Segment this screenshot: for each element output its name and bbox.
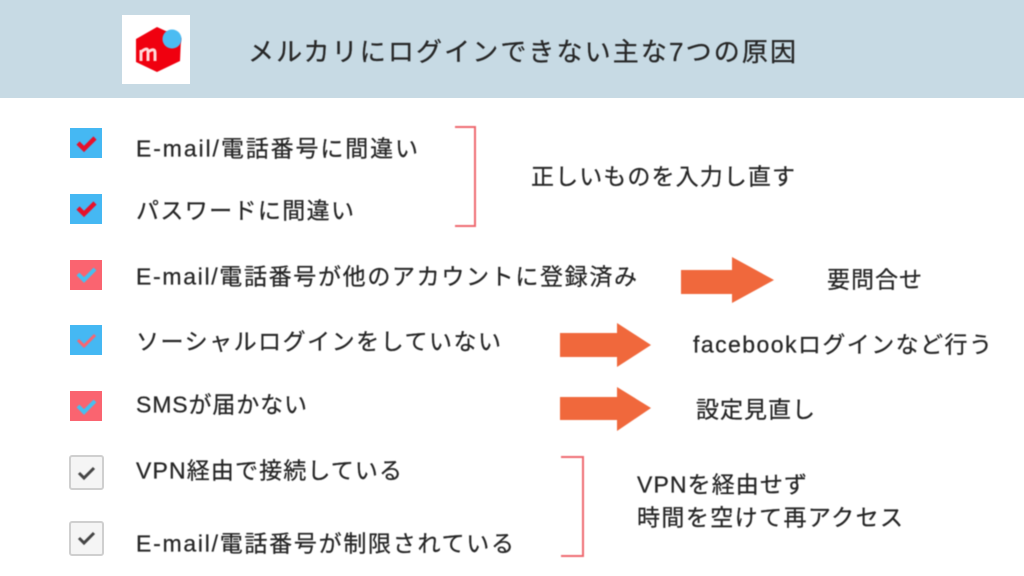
cause: via VPN: VPN経由で接続している	[136, 458, 402, 484]
cause: restricted: E-mail/電話番号が制限されている	[136, 530, 514, 556]
icon: blue checkbox 4	[70, 325, 102, 355]
cause: already registered: E-mail/電話番号が他のアカウントに登録済み	[136, 264, 637, 290]
arrow: to contact	[681, 257, 774, 303]
icon: blue checkbox 1	[70, 128, 102, 158]
solution: no VPN and retry	[637, 472, 903, 530]
solution: facebook login: facebookログインなど行う	[693, 332, 992, 358]
cause: SMS not delivered: SMSが届かない	[136, 392, 307, 418]
cause: no social login: ソーシャルログインをしていない	[136, 328, 501, 354]
icon: mercari logo	[122, 15, 190, 84]
checkbox list: causes	[70, 128, 637, 556]
icon: red checkbox 5	[70, 391, 102, 421]
arrow: to facebook login	[560, 323, 651, 367]
solution: re-enter correctly: 正しいものを入力し直す	[531, 164, 795, 190]
arrow: to settings	[560, 387, 651, 431]
icon: grey checkbox 6	[70, 456, 103, 489]
cause: password mistake: パスワードに間違い	[136, 198, 354, 224]
bracket: first two causes	[455, 127, 475, 226]
icon: red checkbox 3	[70, 260, 102, 290]
title: メルカリにログインできない主な7つの原因	[248, 37, 796, 67]
header band	[0, 0, 1024, 98]
bracket: last two causes	[561, 457, 583, 556]
solution: no VPN and retry: 時間を空けて再アクセス	[637, 504, 903, 530]
solution: contact required: 要問合せ	[827, 266, 922, 292]
icon: blue checkbox 2	[70, 194, 102, 224]
solution: review settings: 設定見直し	[696, 396, 815, 422]
icon: grey checkbox 7	[70, 522, 103, 555]
cause: email or phone mistake: E-mail/電話番号に間違い	[136, 136, 418, 162]
solution: no VPN and retry: VPNを経由せず	[637, 472, 807, 498]
